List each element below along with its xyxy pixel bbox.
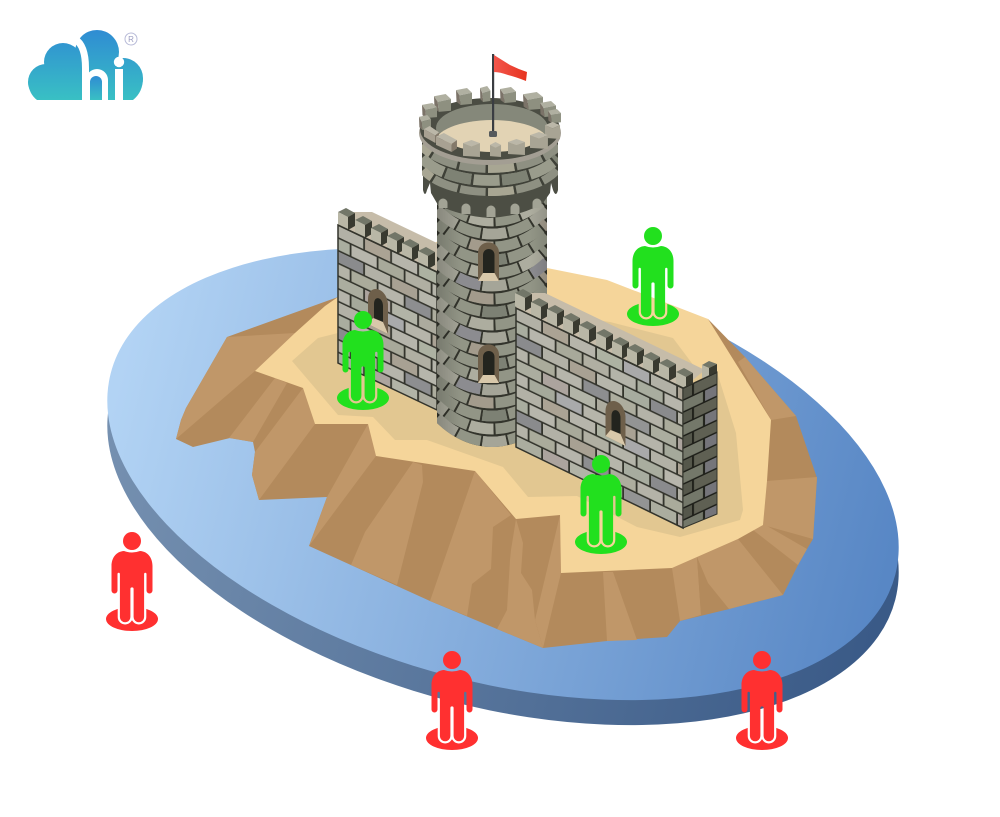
tower upper window (478, 242, 499, 281)
sand plateau (255, 240, 771, 573)
right wall far merlon (702, 361, 717, 380)
left wall bricks (338, 225, 437, 410)
disc top (59, 171, 947, 777)
tower parapet top (420, 98, 560, 160)
flag pole base (489, 131, 497, 137)
tower head corbels (423, 172, 558, 218)
tower lower window (478, 344, 499, 383)
logo inner arch (90, 76, 102, 100)
right wall bricks (516, 308, 683, 528)
green person behind wall (627, 227, 679, 326)
sand shadow (292, 300, 743, 537)
left wall window (368, 289, 388, 334)
red flag cloth (494, 55, 527, 81)
right wall battlements (515, 289, 693, 390)
tower floor (439, 120, 544, 152)
tower rim (419, 101, 561, 165)
logo cloud shape (28, 30, 143, 100)
tower inner wall (436, 104, 548, 152)
water disc (59, 171, 947, 802)
left wall battlements (338, 208, 435, 269)
logo letters h i (75, 39, 124, 100)
tower body (437, 184, 547, 450)
flag pole (492, 54, 494, 134)
logo: hi cloud (28, 30, 143, 100)
green person left (337, 311, 389, 410)
round tower (419, 54, 561, 450)
red person right (736, 651, 788, 750)
right wall end face (683, 372, 717, 528)
red person left (106, 532, 158, 631)
right wall window (606, 401, 626, 446)
tower front merlons (424, 122, 560, 157)
red person middle (426, 651, 478, 750)
green person front (575, 455, 627, 554)
flag (489, 54, 527, 137)
tower head bricks (422, 142, 558, 196)
island rocks (176, 297, 817, 648)
right wall walkway (516, 293, 705, 388)
left castle wall (338, 208, 437, 410)
disc edge (59, 196, 947, 802)
tower back merlons (419, 86, 561, 130)
right castle wall (515, 289, 717, 528)
registered mark: R (128, 35, 134, 44)
left wall walkway (338, 212, 437, 272)
